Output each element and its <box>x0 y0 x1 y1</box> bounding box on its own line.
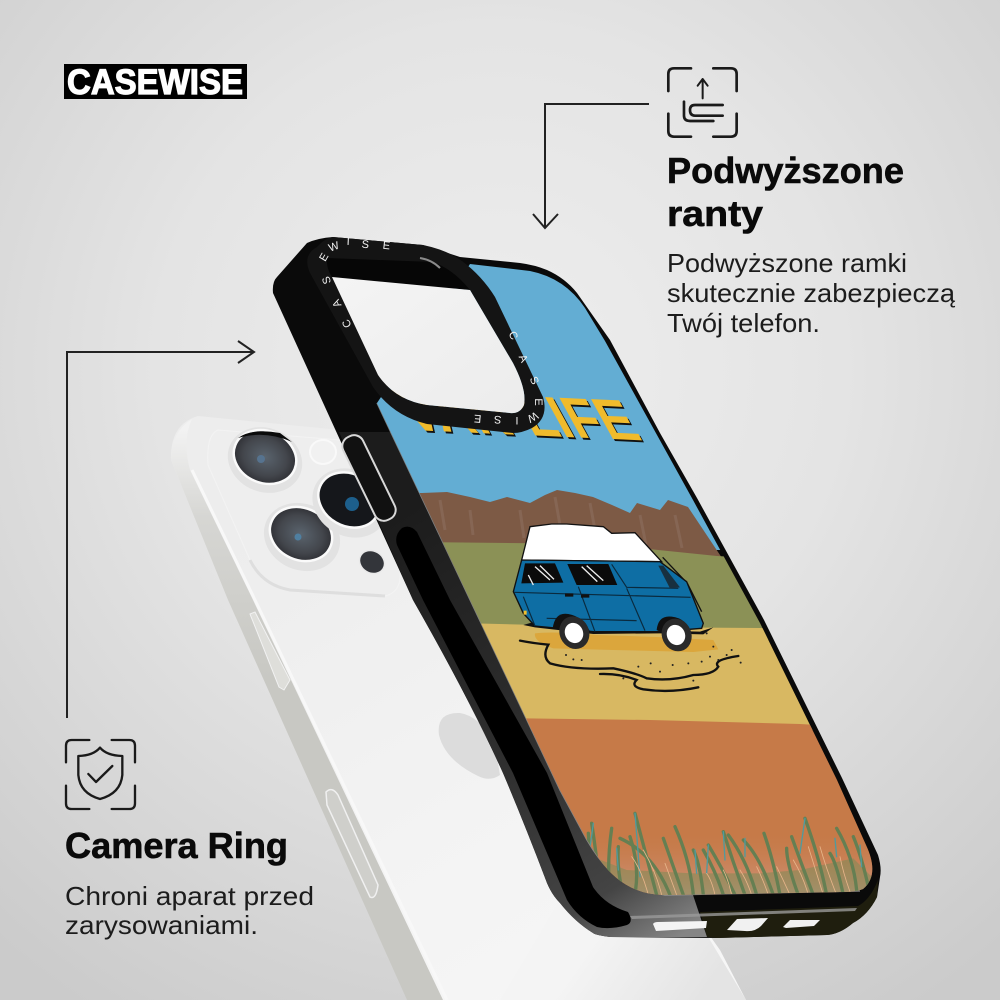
sensor <box>355 546 389 578</box>
handles <box>565 593 590 598</box>
van roof <box>522 524 662 562</box>
port right <box>783 920 820 928</box>
ring lettering: A <box>516 353 530 365</box>
camera ring <box>307 236 545 433</box>
text: raised edges description <box>667 248 956 338</box>
icon: shield <box>66 740 135 809</box>
ring lettering: E <box>317 251 331 264</box>
ring lettering <box>317 236 544 426</box>
heading: Camera Ring: Camera Ring <box>65 825 288 866</box>
ring lettering: S <box>494 413 502 425</box>
black case <box>273 237 881 938</box>
port left <box>653 921 707 931</box>
orange ground <box>526 718 872 895</box>
sand specks <box>566 633 741 681</box>
sand <box>481 624 812 730</box>
ring lettering: S <box>320 275 334 286</box>
apple logo <box>439 713 500 779</box>
text: raised edges description: Twój telefon. <box>667 308 820 338</box>
phone body <box>171 416 746 1000</box>
case shell <box>273 237 881 938</box>
power button <box>339 432 399 524</box>
logo CASEWISE: CASEWISE <box>67 63 243 102</box>
ring lettering: E <box>532 398 544 406</box>
text: raised edges description: skutecznie zabezpieczą <box>667 278 956 308</box>
ring body <box>307 237 545 433</box>
grass <box>588 813 872 897</box>
bevel <box>339 432 707 937</box>
white phone <box>171 416 746 1000</box>
front wheel <box>656 616 692 652</box>
panel lines <box>514 564 691 632</box>
side slot <box>396 527 631 928</box>
title VAN LIFE <box>392 390 644 442</box>
ring lettering: S <box>527 375 541 387</box>
vent <box>658 566 680 588</box>
olive tint bottom right <box>700 880 878 938</box>
phone artwork <box>377 264 872 895</box>
ring lettering: E <box>382 240 391 252</box>
side button lower <box>326 790 378 898</box>
ring opening <box>332 277 525 413</box>
window middle <box>567 564 617 585</box>
title VAN LIFE: VAN LIFE <box>384 379 651 453</box>
plateau shadow <box>250 560 385 596</box>
lens right <box>300 455 400 551</box>
van body <box>513 560 703 632</box>
mountain texture <box>440 497 682 548</box>
phone side band <box>171 419 443 1000</box>
heading: Podwyższone ranty: ranty <box>667 193 763 234</box>
flash <box>310 440 336 464</box>
pink grass base <box>598 842 872 895</box>
ring glint <box>420 258 440 268</box>
icon: raised edges <box>668 68 737 137</box>
window rear <box>521 563 563 583</box>
under shadow <box>523 622 713 634</box>
window glints <box>528 566 603 585</box>
tire tracks <box>520 641 738 691</box>
ring lettering: I <box>346 236 350 248</box>
light <box>524 611 527 615</box>
lens lower <box>253 491 351 583</box>
bottom highlight <box>630 908 857 919</box>
ring lettering: A <box>330 297 344 309</box>
text: camera ring description: zarysowaniami. <box>65 910 258 940</box>
ring lettering: I <box>515 414 519 426</box>
ring lettering: C <box>340 317 354 330</box>
heading: Podwyższone ranty <box>667 150 904 234</box>
arrow: camera ring callout <box>67 341 254 718</box>
rear wheel <box>552 614 590 649</box>
text: raised edges description: Podwyższone ramki <box>667 248 907 278</box>
lower back highlight <box>500 900 746 1000</box>
side button upper <box>250 612 290 690</box>
mountains <box>410 490 730 570</box>
text: camera ring description <box>65 881 314 940</box>
ring inner wall <box>327 258 470 290</box>
van <box>513 524 741 691</box>
green field <box>443 542 768 640</box>
lens upper <box>218 416 312 504</box>
text: camera ring description: Chroni aparat przed <box>65 881 314 911</box>
camera plateau <box>208 430 400 596</box>
edge highlight <box>377 403 860 895</box>
sky <box>377 264 720 550</box>
arrow: top callout to rim <box>533 104 649 228</box>
band highlight <box>192 470 447 1000</box>
roof rack <box>663 557 702 612</box>
ring lettering: E <box>474 412 482 424</box>
title VAN LIFE: VAN LIFE <box>386 381 653 455</box>
heading: Podwyższone ranty: Podwyższone <box>667 150 904 191</box>
ring lettering: W <box>327 240 341 255</box>
ring lettering: C <box>506 330 520 342</box>
sand shadow patch <box>535 632 718 652</box>
port center <box>727 918 768 931</box>
ring lettering: S <box>361 239 369 251</box>
ring lettering: W <box>524 409 540 425</box>
